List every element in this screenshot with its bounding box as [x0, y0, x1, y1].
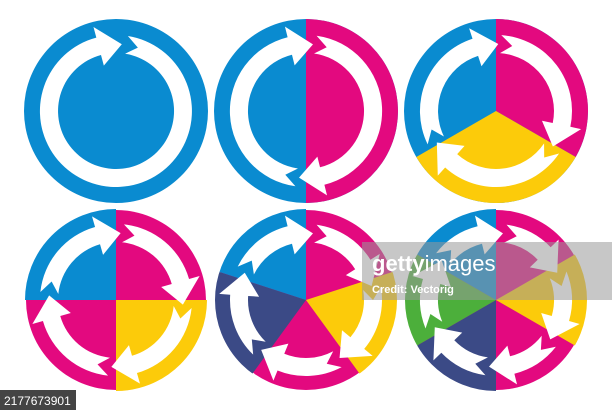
circle 3: three arrows [397, 19, 597, 227]
image id label [0, 390, 76, 410]
watermark band: Credit: Vectorig [372, 284, 454, 296]
watermark band [362, 242, 612, 300]
watermark band: gettyimages [372, 251, 495, 276]
circle 6: six arrows [399, 206, 593, 394]
image id label: 2177673901 [4, 394, 71, 408]
circle 4: four arrows [24, 208, 208, 392]
circle 1: single arrow [20, 7, 209, 204]
circle 2: two arrows [211, 19, 401, 203]
circle 5: five arrows [214, 205, 410, 402]
